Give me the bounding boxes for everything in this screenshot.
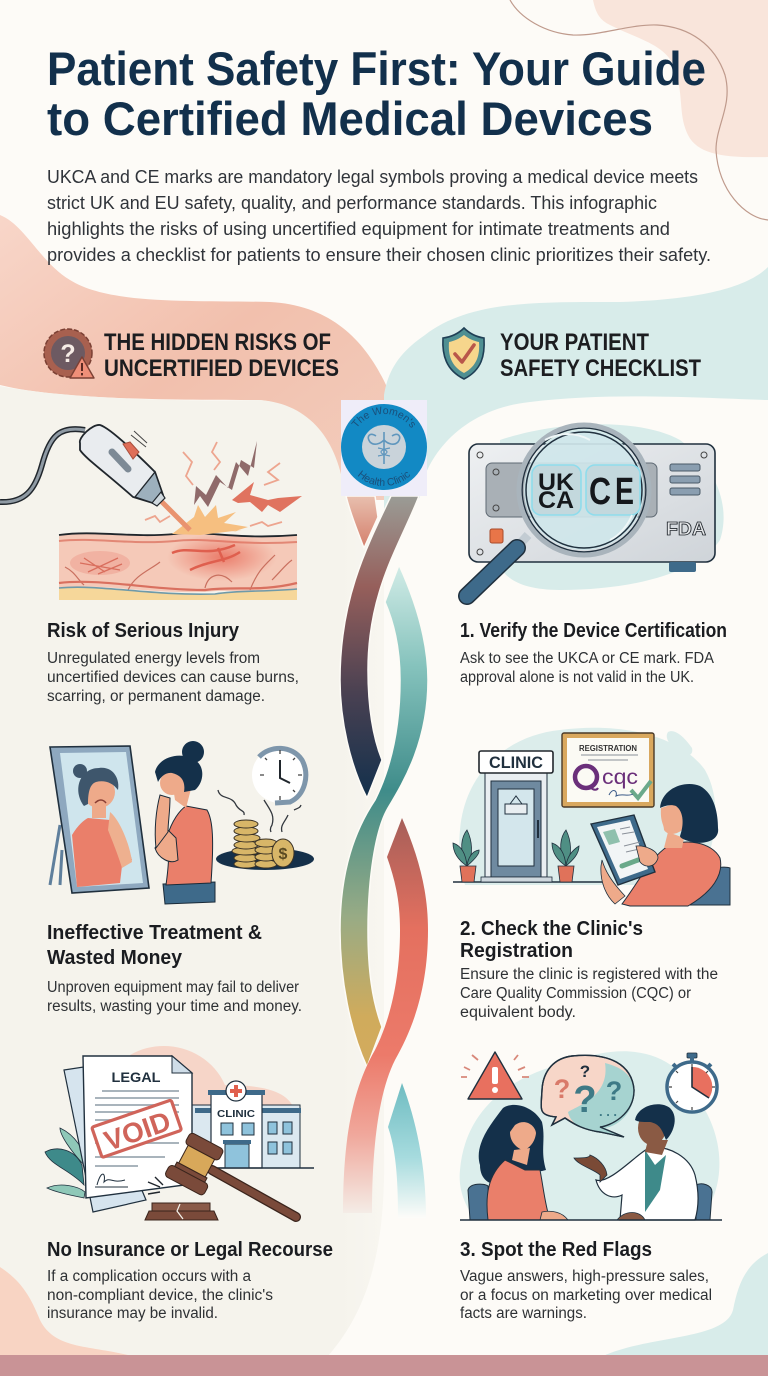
text: red flags: 3. Spot the Red Flags [460,1239,652,1261]
text: red flags: Vague answers, high-pressure sales, [460,1268,709,1285]
heading: patient checklist: SAFETY CHECKLIST [500,355,701,382]
clock [252,747,308,803]
text: risk of serious injury [47,620,299,705]
teal blob [459,728,716,885]
steam wiggles [218,790,301,832]
ribbon: red strand [343,818,428,1213]
text: verify device certification: 1. Verify the Device Certification [460,620,727,642]
salmon header background left [0,215,386,500]
handpiece [80,425,163,503]
gavel [145,1211,218,1220]
void stamp: VOID [100,1105,175,1157]
text: verify device certification: approval alone is not valid in the UK. [460,669,694,686]
intro paragraph: highlights the risks of using uncertified equipment for intimate treatments and [47,218,670,239]
CE mark: C [589,471,611,513]
illustration: clinic registration: REGISTRATION [579,744,637,753]
woman [163,882,215,904]
coins [216,848,314,870]
teal header background right [384,267,768,525]
heading: hidden risks: THE HIDDEN RISKS OF [104,329,331,356]
text: ineffective treatment: Unproven equipment may fail to deliver [47,979,299,996]
text: clinic registration: Care Quality Commission (CQC) or [460,985,691,1002]
illustration: void legal document: CLINIC [217,1108,255,1120]
back sheet [64,1066,146,1212]
decorative thin curved line [510,0,768,220]
CE mark: E [615,471,634,513]
patient woman [468,1184,490,1220]
illustration: red flags conversation: ? [606,1076,622,1106]
FDA mark: FDA [666,519,706,539]
building backdrop blob [130,1046,295,1112]
hospital building [192,1105,300,1168]
title [47,42,706,145]
clinic sign [479,751,553,773]
beam [160,500,190,530]
UKCA mark: UK [538,469,575,496]
clinic logo: Health Clinic [358,470,410,486]
heading: patient checklist [500,329,701,382]
speech bubbles [541,1055,634,1137]
illustration: clinic registration [453,728,730,906]
CE mark [589,471,634,513]
teal blob [498,424,724,590]
text: ineffective treatment [47,922,302,1015]
teal blob [460,1051,719,1220]
text: red flags: facts are warnings. [460,1305,587,1322]
ribbon: grey to navy strand [340,496,419,798]
text: risk of serious injury: uncertified devices can cause burns, [47,669,299,686]
illustration: red flags conversation [460,1051,722,1220]
heading: hidden risks: UNCERTIFIED DEVICES [104,355,339,382]
warning triangle [468,1052,522,1099]
illustration: void legal document: LEGAL [112,1069,161,1085]
heading: hidden risks [104,329,339,382]
CQC logo [575,766,597,788]
ribbon: bottom teal strand [388,1083,426,1218]
illustration: clinic registration: CLINIC [489,754,543,772]
intro paragraph [47,166,711,265]
title: to Certified Medical Devices [47,92,653,145]
leaves [45,1149,84,1185]
text: no insurance: insurance may be invalid. [47,1305,218,1322]
illustration: mirror and wasted money [50,741,314,904]
text: red flags [460,1239,712,1322]
title: Patient Safety First: Your Guide [47,42,706,95]
illustration: device certification check [467,424,724,596]
illustration: mirror and wasted money: $ [279,846,288,863]
stopwatch [687,1053,697,1058]
ribbon: teal to gold strand [340,565,428,1067]
illustration: void legal document [45,1046,314,1220]
illustration: device burning skin [0,425,302,600]
device body [469,444,715,562]
table line [460,1219,722,1221]
magnifier lens [524,430,644,550]
text: verify device certification [460,620,727,686]
text: clinic registration [460,918,718,1021]
bottom left salmon corner [0,1267,132,1356]
text: clinic registration: 2. Check the Clinic's [460,918,643,940]
burn spark [172,505,248,535]
icon: safety shield [443,328,484,379]
registration certificate [562,733,654,807]
text: no insurance: No Insurance or Legal Recourse [47,1239,333,1261]
icon: warning badge: ? [60,340,76,368]
intro paragraph: strict UK and EU safety, quality, and performance standards. This infographic [47,192,657,213]
text: risk of serious injury: Unregulated energy levels from [47,650,260,667]
illustration: device certification check: CA [538,487,574,514]
text: no insurance: If a complication occurs with a [47,1268,251,1285]
illustration: red flags conversation: ... [599,1104,617,1119]
mirror [50,825,62,885]
text: clinic registration: equivalent body. [460,1004,576,1021]
text: ineffective treatment: results, wasting your time and money. [47,998,302,1015]
text: risk of serious injury: scarring, or permanent damage. [47,688,265,705]
icon: warning badge [44,329,94,378]
ribbon: salmon top piece [346,496,378,548]
text: clinic registration: Ensure the clinic is registered with the [460,966,718,983]
text: no insurance: non-compliant device, the clinic's [47,1287,273,1304]
text: verify device certification: Ask to see the UKCA or CE mark. FDA [460,650,715,667]
question marks: ? [554,1074,570,1104]
doctor [696,1184,712,1220]
text: red flags: or a focus on marketing over medical [460,1287,712,1304]
clinic logo [341,400,427,496]
bottom bar [0,1355,768,1376]
magnifier handle [518,535,528,546]
central twisted ribbon [340,496,428,1218]
illustration: red flags conversation: ? [573,1079,597,1121]
reflected woman [72,818,132,887]
clinic logo: The Women's [351,406,415,428]
cable [0,429,85,502]
clinic door [485,773,547,877]
bottom right teal corner [603,1253,768,1356]
decorative peach blob top right [593,0,768,157]
woman with tablet [680,867,730,905]
left cream panel [0,386,384,1356]
skin layers [59,533,297,600]
text: ineffective treatment: Wasted Money [47,947,183,969]
text: no insurance [47,1239,333,1322]
plants [453,830,579,866]
text: risk of serious injury: Risk of Serious Injury [47,620,240,642]
heading: patient checklist: YOUR PATIENT [500,329,649,356]
intro paragraph: provides a checklist for patients to ensure their chosen clinic prioritizes their safety. [47,244,711,265]
text: ineffective treatment: Ineffective Treatment & [47,922,262,944]
illustration: red flags conversation: ? [580,1062,590,1081]
legal document [83,1056,192,1198]
intro paragraph: UKCA and CE marks are mandatory legal symbols proving a medical device meets [47,166,698,187]
text: clinic registration: Registration [460,940,573,962]
illustration: clinic registration: cqc [602,766,638,789]
floor line [453,881,606,883]
